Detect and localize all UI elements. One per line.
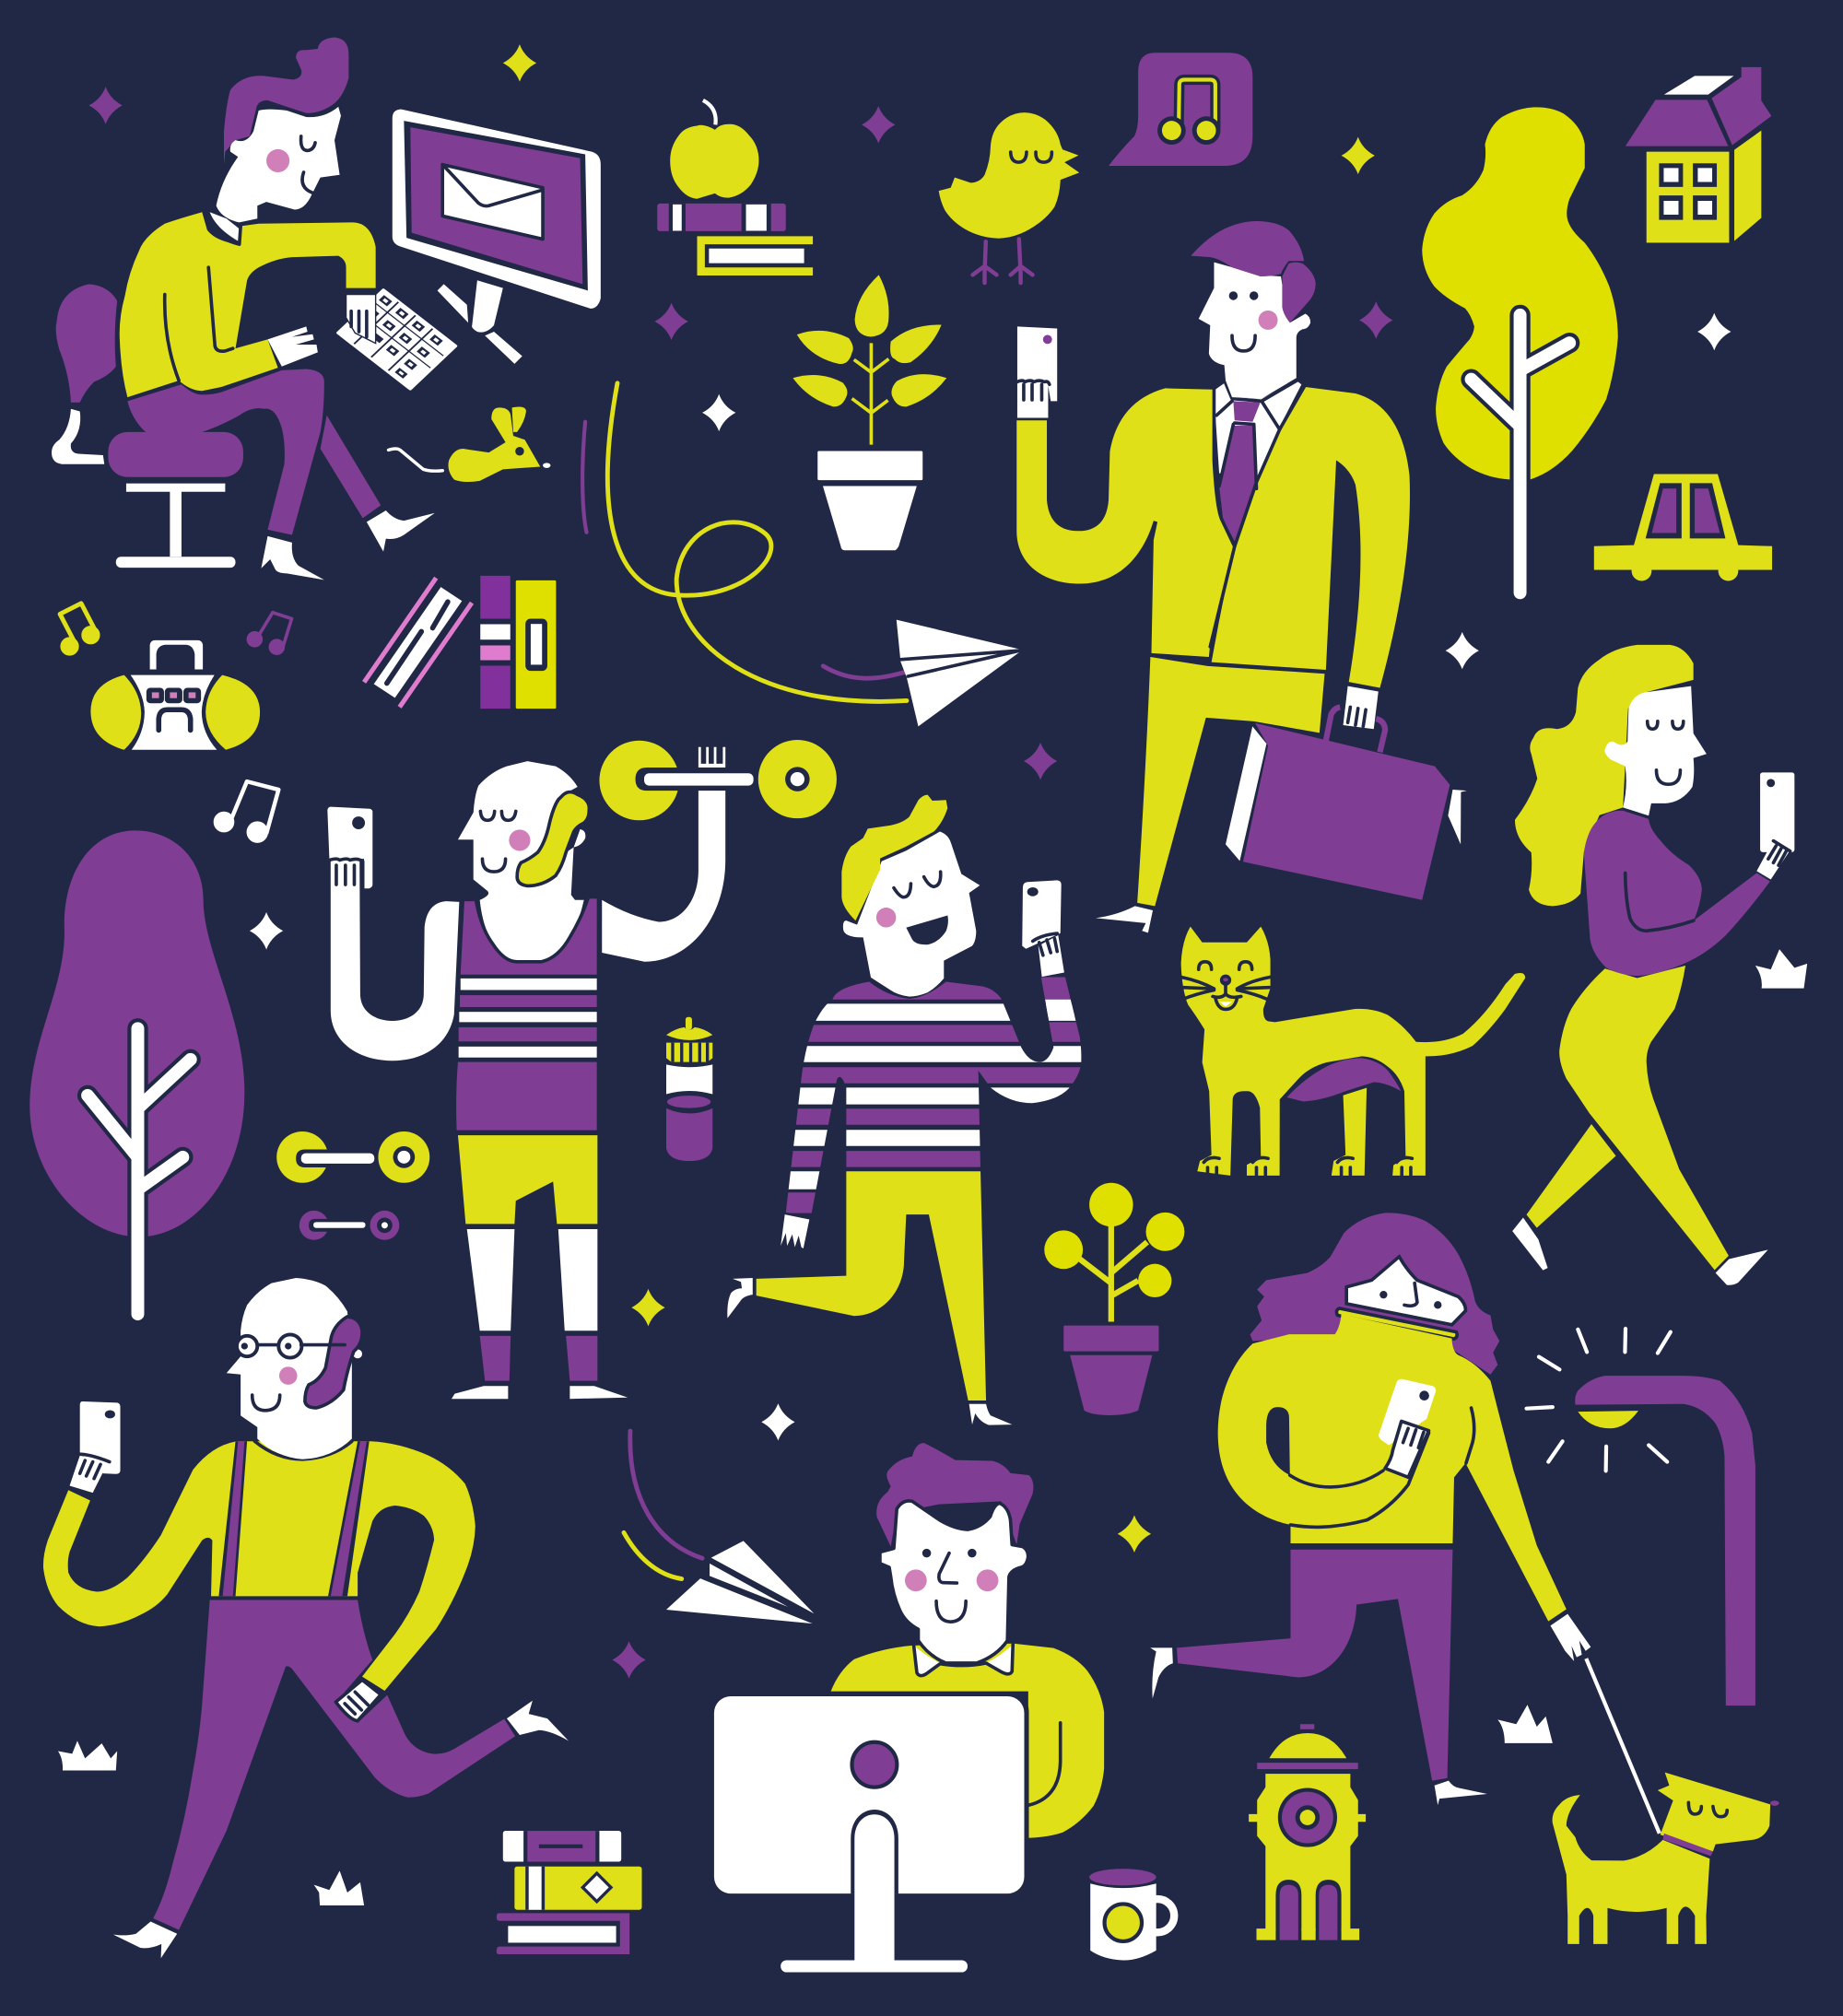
trousers <box>127 369 324 534</box>
music note purple <box>248 613 292 653</box>
sideburn <box>305 1317 362 1408</box>
water bottle <box>666 1017 712 1161</box>
shorts <box>458 1135 597 1224</box>
potted tree <box>1044 1183 1184 1415</box>
trousers <box>1137 657 1324 906</box>
front shoe <box>261 536 324 580</box>
fire hydrant <box>1249 1724 1366 1940</box>
thin purple stroke <box>582 422 586 533</box>
collar <box>210 212 240 241</box>
phone and hand <box>1022 880 1062 949</box>
computer monitor with envelope <box>393 110 601 364</box>
grass tuft right <box>1755 949 1807 989</box>
man at computer <box>120 37 435 580</box>
sweater <box>120 212 376 397</box>
tie <box>1219 401 1261 541</box>
small purple dumbbell <box>299 1211 399 1240</box>
shirt <box>1215 381 1301 482</box>
yellow cat <box>1181 927 1525 1176</box>
front shoe <box>1096 906 1153 932</box>
grass tufts <box>58 1705 1553 1905</box>
music speech bubble <box>1109 53 1252 166</box>
looping yellow flight path <box>607 383 907 701</box>
sideburn <box>517 792 589 885</box>
monitor stand <box>438 280 522 364</box>
boombox <box>90 640 260 750</box>
dumbbell man <box>327 740 837 1399</box>
collar <box>1336 1308 1457 1339</box>
phone arm <box>331 860 459 1061</box>
legs <box>467 1229 514 1330</box>
phone hand <box>70 1456 108 1493</box>
apple on books <box>657 100 813 275</box>
computer man <box>710 1443 1104 1973</box>
hair <box>1515 645 1694 906</box>
leash hand <box>1550 1614 1591 1661</box>
yellow car <box>1594 474 1772 580</box>
music note yellow <box>60 604 98 653</box>
chair <box>52 284 243 568</box>
suspenders <box>218 1441 370 1596</box>
purple flight path <box>823 666 908 678</box>
hand holding phone <box>1017 326 1057 418</box>
hair <box>876 1443 1033 1547</box>
street lamp <box>1527 1329 1755 1705</box>
small yellow dumbbell <box>276 1131 429 1183</box>
trousers <box>153 1600 515 1930</box>
striped man <box>727 795 1093 1425</box>
paper plane bottom <box>624 1431 814 1623</box>
purple tree <box>29 830 244 1314</box>
trousers <box>757 1171 986 1401</box>
sparkle stars <box>88 44 1731 1679</box>
walking woman with long hair <box>1512 645 1794 1285</box>
raised arm <box>602 791 725 962</box>
phone <box>80 1401 121 1474</box>
book stack tilted <box>364 576 556 709</box>
back shoe sliver <box>1448 790 1467 844</box>
shoes <box>507 1701 569 1741</box>
face <box>217 107 341 222</box>
back leg <box>321 416 381 518</box>
briefcase handle <box>1326 707 1385 752</box>
jacket left <box>1016 388 1235 657</box>
big yellow tree <box>1422 107 1618 592</box>
sweater <box>831 1644 1104 1838</box>
head <box>843 832 980 997</box>
book stack bottom <box>497 1831 641 1954</box>
monitor <box>710 1692 1029 1898</box>
glasses <box>237 1336 257 1356</box>
sweater <box>1218 1314 1567 1622</box>
phone <box>1379 1379 1436 1445</box>
jacket right <box>1212 387 1410 688</box>
music note white <box>216 781 278 841</box>
briefcase <box>1226 726 1266 861</box>
other hand <box>267 326 318 367</box>
yellow dog <box>1553 1773 1779 1944</box>
lower hand <box>335 1680 381 1721</box>
old man with glasses <box>43 1278 569 1958</box>
hand and phone <box>1760 772 1794 852</box>
hand on keyboard <box>346 295 376 344</box>
sweater <box>771 978 1093 1213</box>
head <box>227 1278 352 1459</box>
coffee mug <box>1089 1869 1174 1960</box>
house <box>1626 67 1771 242</box>
front leg <box>1559 966 1729 1270</box>
businessman <box>1016 221 1467 932</box>
yellow bird <box>939 112 1079 283</box>
hair <box>1250 1213 1499 1375</box>
face <box>1604 686 1707 815</box>
sweater and arms <box>43 1441 475 1691</box>
briefcase hand <box>1344 686 1379 729</box>
paper plane top <box>897 620 1020 726</box>
hair <box>224 37 348 165</box>
tank top <box>461 898 597 975</box>
collar <box>914 1645 1013 1676</box>
face <box>880 1501 1028 1663</box>
head <box>458 761 584 962</box>
purple top and arm <box>1584 811 1770 976</box>
leash <box>1586 1659 1660 1834</box>
phone hand <box>1385 1421 1428 1477</box>
potted plant <box>792 275 946 550</box>
face <box>1346 1257 1465 1325</box>
keyboard <box>335 288 458 391</box>
envelope <box>442 165 543 240</box>
trousers <box>1177 1550 1452 1781</box>
arm slot <box>1266 1407 1290 1475</box>
dumbbell <box>599 740 837 820</box>
back leg <box>1527 1124 1616 1228</box>
head <box>1199 263 1310 399</box>
mouse creature <box>389 407 550 482</box>
woman with dog <box>1150 1213 1660 1834</box>
back shoe <box>367 510 435 552</box>
